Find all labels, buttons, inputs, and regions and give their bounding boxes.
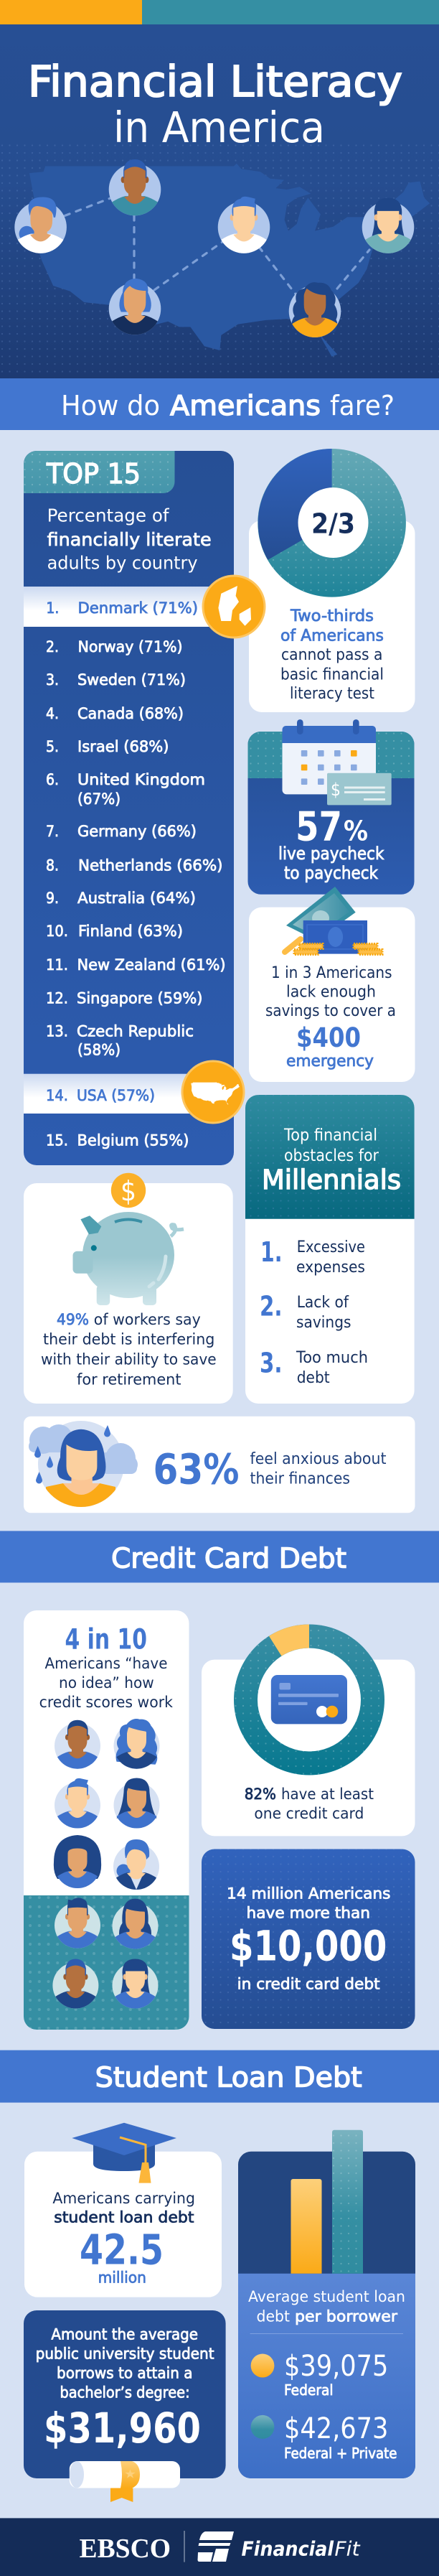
- stat text: Two-thirds: [290, 607, 374, 625]
- panel subtitle: Percentage of: [47, 505, 170, 526]
- avatar: man with quiff: [216, 197, 272, 260]
- ranked country list: Singapore (59%): [77, 989, 202, 1007]
- chart caption: Average student loan: [248, 2288, 405, 2306]
- stat text: cannot pass a: [281, 646, 383, 664]
- pie chart: two thirds: 2/3: [311, 508, 355, 540]
- ranked country list: Netherlands (66%): [78, 857, 222, 874]
- ranked country list: 10.: [46, 923, 68, 940]
- bar chart: [291, 2130, 363, 2274]
- stat text: [41, 1311, 217, 1389]
- avatar: woman with bob: [107, 279, 163, 341]
- highlighted row: USA: 14.: [46, 1087, 68, 1104]
- ranked country list: (58%): [77, 1042, 121, 1059]
- legend: federal plus private: $42,673: [284, 2412, 388, 2445]
- stat text: 82%: [245, 1786, 276, 1803]
- obstacle 3: debt: [297, 1368, 330, 1387]
- ranked country list: 6.: [46, 771, 59, 788]
- ranked country list: 12.: [46, 989, 68, 1007]
- stat: 57 percent: to paycheck: [284, 863, 378, 883]
- obstacle 2: [260, 1291, 351, 1332]
- icon: FinancialFit logo: [198, 2531, 234, 2562]
- ranked country list: 11.: [46, 956, 68, 974]
- icon: money and coins: [285, 887, 382, 955]
- stat text: one credit card: [254, 1805, 364, 1823]
- stat text: [36, 2326, 214, 2453]
- obstacle 1: 1.: [260, 1236, 283, 1268]
- stat text: [265, 964, 396, 1070]
- icon: dollar coin: [111, 1173, 146, 1208]
- stat text: credit scores work: [39, 1694, 174, 1712]
- section band: how do Americans fare: [0, 378, 439, 430]
- obstacle 2: 2.: [260, 1291, 283, 1322]
- stat: 57 percent: 57: [296, 803, 342, 850]
- stat text: $31,960: [44, 2404, 201, 2453]
- panel: credit score knowledge: [24, 1610, 189, 2030]
- obstacle 2: savings: [296, 1313, 351, 1332]
- stat text: lack enough: [286, 984, 376, 1002]
- panel subtitle: [47, 505, 212, 574]
- ranked country list: Canada (68%): [77, 705, 184, 722]
- panel: financial anxiety: [24, 1417, 415, 1513]
- icon: anxious woman under rain clouds: [29, 1421, 138, 1508]
- ranked country list: 9.: [46, 890, 59, 907]
- icon: calendar and cheque: [283, 719, 392, 805]
- stat text: literacy test: [290, 685, 374, 703]
- highlighted row: Denmark: [24, 587, 234, 627]
- icon: dollar coin: $: [121, 1175, 136, 1207]
- panel: 10000 dollar debt: [202, 1849, 415, 2029]
- panel: retirement savings: [24, 1173, 233, 1404]
- highlighted row: USA: [24, 1074, 234, 1114]
- icon: piggy bank: [73, 1212, 184, 1305]
- tab: top 15: TOP 15: [46, 458, 141, 490]
- logo: FinancialFit wordmark: Fit: [334, 2537, 361, 2561]
- logo: EBSCO: EBSCO: [79, 2534, 171, 2564]
- header panel: [0, 24, 439, 378]
- avatar: woman with curly hair: [287, 282, 343, 344]
- ranked country list: Czech Republic: [77, 1022, 194, 1040]
- stat text: savings to cover a: [265, 1002, 396, 1020]
- stat text: of Americans: [280, 627, 384, 645]
- dashed connector lines: [65, 198, 369, 294]
- avatar grid: ten people: [51, 1719, 161, 2015]
- legend: federal plus private: Federal + Private: [284, 2445, 397, 2462]
- stat text: 4 in 10: [65, 1624, 147, 1656]
- ranked country list: 3.: [46, 671, 59, 689]
- stat text: emergency: [286, 1053, 374, 1070]
- logo: FinancialFit wordmark: Financial: [241, 2537, 334, 2561]
- section band: credit card debt: [0, 1531, 439, 1582]
- stat text: of workers say: [94, 1311, 201, 1329]
- stat text: public university student: [36, 2345, 214, 2362]
- section band: how do Americans fare: Americans: [170, 390, 321, 421]
- highlighted row: Denmark: 1.: [46, 599, 59, 617]
- ranked country list: 13.: [46, 1022, 68, 1040]
- stat text: Amount the average: [51, 2326, 198, 2343]
- obstacle 2: Lack of: [297, 1293, 349, 1312]
- panel: average student loan debt per borrower: [238, 2130, 415, 2478]
- pie chart: two thirds: [258, 449, 406, 597]
- chart caption: per borrower: [295, 2307, 397, 2326]
- obstacle 1: Excessive: [297, 1238, 365, 1256]
- stat text: borrows to attain a: [57, 2365, 192, 2382]
- stat text: million: [98, 2269, 146, 2287]
- ranked country list: Germany (66%): [77, 823, 197, 840]
- stat text: $400: [296, 1022, 361, 1053]
- ranked country list: Sweden (71%): [77, 671, 186, 689]
- stat text: [154, 1445, 387, 1494]
- ranked country list: 8.: [46, 857, 59, 874]
- panel: paycheck to paycheck: [248, 719, 415, 895]
- stat text: no idea” how: [59, 1674, 154, 1692]
- top colour bar: [0, 0, 439, 24]
- section band: student loan debt: Student Loan Debt: [95, 2062, 362, 2094]
- icon: diploma scroll: [70, 2461, 180, 2502]
- ranked country list: 5.: [46, 738, 59, 755]
- panel: two-thirds stat: [249, 449, 415, 712]
- obstacle 3: Too much: [296, 1348, 368, 1367]
- title: in America: [113, 103, 325, 152]
- ranked country list: 7.: [46, 823, 59, 840]
- stat text: [280, 607, 384, 703]
- stat text: [39, 1624, 174, 1712]
- section band: how do Americans fare: How do: [61, 390, 160, 421]
- stat text: in credit card debt: [237, 1976, 380, 1993]
- section band: student loan debt: [0, 2050, 439, 2103]
- icon: Denmark coin: [203, 576, 265, 638]
- stat: 57 percent: [278, 803, 384, 883]
- stat text: 49%: [57, 1311, 89, 1329]
- highlighted row: Denmark: Denmark (71%): [77, 599, 198, 617]
- ranked country list: Norway (71%): [77, 638, 182, 655]
- ranked country list: New Zealand (61%): [77, 956, 225, 974]
- stat text: have more than: [247, 1904, 370, 1921]
- panel subtitle: financially literate: [47, 529, 212, 550]
- stat text: Americans “have: [44, 1655, 168, 1673]
- ranked country list: Finland (63%): [78, 923, 183, 940]
- panel: top 15 countries: [24, 451, 234, 1165]
- avatar: man with short hair: [107, 159, 163, 222]
- panel heading: Top financial: [283, 1126, 377, 1145]
- chart caption: [248, 2288, 405, 2326]
- stat text: 14 million Americans: [227, 1885, 390, 1902]
- ranked country list: (67%): [77, 790, 121, 808]
- panel heading: [262, 1126, 401, 1195]
- ranked country list: Belgium (55%): [77, 1132, 189, 1149]
- legend: federal: $39,075: [284, 2350, 388, 2383]
- panel: emergency savings: [249, 887, 415, 1082]
- stat text: 1 in 3 Americans: [271, 964, 392, 982]
- stat text: basic financial: [280, 666, 384, 684]
- panel: Americans carrying student loan debt: [24, 2123, 222, 2297]
- obstacle 1: expenses: [296, 1258, 365, 1277]
- icon: USA coin: [182, 1061, 244, 1123]
- stat text: 42.5: [80, 2226, 164, 2274]
- ranked country list: United Kingdom: [77, 771, 205, 788]
- stat text: $10,000: [230, 1921, 387, 1970]
- footer: [0, 2518, 439, 2576]
- map of the United States: [29, 164, 430, 357]
- panel: bachelor's degree borrowing: [24, 2310, 226, 2502]
- stat text: for retirement: [77, 1371, 181, 1389]
- icon: graduation cap: [72, 2123, 176, 2183]
- stat text: have at least: [281, 1786, 374, 1803]
- stat text: 63%: [154, 1445, 240, 1494]
- stat text: [245, 1786, 374, 1823]
- ranked country list: [46, 638, 225, 1149]
- title: Financial Literacy: [28, 57, 402, 106]
- stat: 57 percent: %: [344, 815, 368, 846]
- icon: credit card: [271, 1675, 347, 1724]
- panel: millennial obstacles: [245, 1095, 415, 1404]
- legend: federal: [251, 2350, 388, 2399]
- title: [28, 57, 402, 152]
- stat text: student loan debt: [54, 2209, 194, 2227]
- obstacle 1: [260, 1236, 365, 1277]
- highlighted row: USA: USA (57%): [77, 1087, 155, 1104]
- ranked country list: Israel (68%): [77, 738, 169, 755]
- avatar: woman with bun: [13, 197, 68, 260]
- ranked country list: 2.: [46, 638, 59, 655]
- panel heading: Millennials: [262, 1165, 401, 1195]
- donut chart: 82 percent: [234, 1624, 384, 1775]
- stat text: with their ability to save: [41, 1351, 217, 1369]
- tab: top 15: [24, 451, 175, 493]
- ranked country list: 15.: [46, 1132, 68, 1149]
- stat text: their debt is interfering: [43, 1331, 214, 1349]
- stat text: Americans carrying: [52, 2190, 195, 2208]
- ranked country list: 4.: [46, 705, 59, 722]
- panel subtitle: adults by country: [47, 553, 198, 574]
- avatar: woman with long hair: [360, 198, 416, 260]
- obstacle 3: 3.: [260, 1348, 283, 1379]
- ranked country list: Australia (64%): [77, 890, 196, 907]
- panel: credit card ownership: [202, 1624, 415, 1836]
- stat text: [227, 1885, 390, 1993]
- chart caption: debt: [257, 2307, 290, 2326]
- legend: federal plus private: [251, 2412, 397, 2462]
- legend: federal: Federal: [284, 2381, 333, 2399]
- stat text: bachelor’s degree:: [60, 2384, 190, 2401]
- section band: credit card debt: Credit Card Debt: [111, 1542, 346, 1574]
- icon: calendar and cheque: $: [331, 780, 341, 800]
- stat: 57 percent: live paycheck: [278, 844, 384, 864]
- section band: how do Americans fare: fare?: [330, 390, 395, 421]
- stat text: their finances: [250, 1470, 350, 1488]
- stat text: [52, 2190, 195, 2287]
- icon: diploma scroll: ★: [124, 2467, 136, 2481]
- obstacle 3: [260, 1348, 368, 1387]
- stat text: feel anxious about: [250, 1450, 387, 1468]
- panel heading: obstacles for: [284, 1147, 379, 1165]
